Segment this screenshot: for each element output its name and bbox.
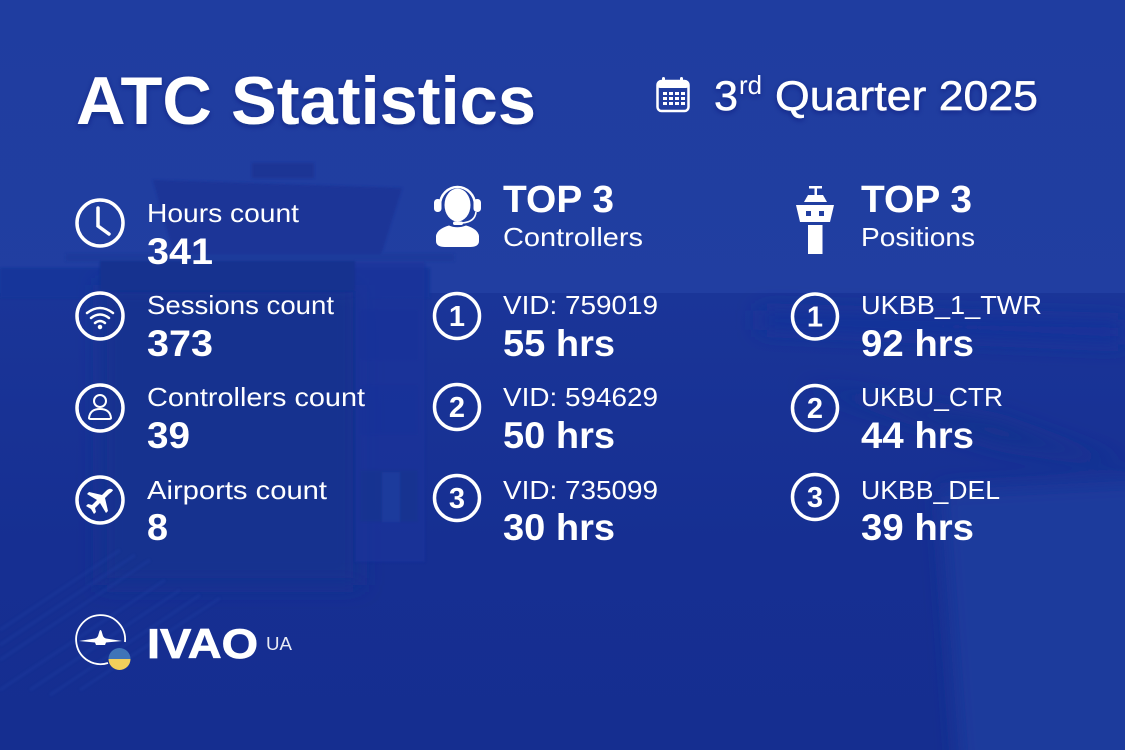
badge: rank 2: 2 bbox=[807, 393, 823, 425]
badge: rank 1: 1 bbox=[807, 302, 823, 334]
quarter label: 3 bbox=[714, 72, 738, 119]
panel: overall counts bbox=[77, 198, 366, 548]
controller 1 bbox=[503, 290, 658, 364]
quarter label: Quarter 2025 bbox=[775, 72, 1038, 119]
wordmark: IVAO bbox=[147, 620, 258, 667]
badge: rank 1 bbox=[434, 294, 480, 338]
controller 2 bbox=[503, 382, 658, 456]
heading: top 3 positions: TOP 3 bbox=[861, 179, 972, 221]
stat: hours count: 341 bbox=[147, 231, 213, 272]
wordmark: UA bbox=[266, 634, 292, 654]
badge: rank 3 bbox=[792, 474, 838, 520]
stat: controllers count: 39 bbox=[147, 415, 190, 456]
logo: IVAO UA bbox=[76, 615, 292, 671]
controller 2: 50 hrs bbox=[503, 415, 615, 456]
stat: airports count bbox=[147, 475, 328, 548]
badge: rank 2 bbox=[792, 386, 838, 430]
position 3: UKBB_DEL bbox=[861, 475, 1000, 505]
controller 1: VID: 759019 bbox=[503, 290, 658, 320]
stat: controllers count bbox=[147, 382, 366, 456]
panel: top 3 controllers bbox=[434, 179, 658, 548]
heading: top 3 controllers: Controllers bbox=[503, 222, 643, 252]
icon: control tower bbox=[796, 186, 834, 254]
quarter label: rd bbox=[739, 70, 762, 100]
badge: rank 2 bbox=[434, 384, 480, 430]
controller 2: VID: 594629 bbox=[503, 382, 658, 412]
badge: rank 3 bbox=[434, 476, 480, 520]
icon: airplane bbox=[77, 477, 123, 523]
title: ATC Statistics bbox=[76, 63, 536, 139]
icon: wifi bbox=[77, 293, 123, 339]
badge: rank 3: 3 bbox=[449, 483, 465, 515]
icon: clock bbox=[77, 200, 123, 246]
position 1: UKBB_1_TWR bbox=[861, 290, 1042, 320]
position 2 bbox=[861, 382, 1003, 456]
controller 3 bbox=[503, 475, 658, 548]
stat: sessions count bbox=[147, 290, 335, 364]
position 1: 92 hrs bbox=[861, 323, 974, 364]
heading: top 3 positions: Positions bbox=[861, 222, 975, 252]
position 3 bbox=[861, 475, 1000, 548]
stat: sessions count: Sessions count bbox=[147, 290, 335, 320]
badge: rank 1 bbox=[792, 294, 838, 339]
controller 3: VID: 735099 bbox=[503, 475, 658, 505]
logo mark: ring, plane and Ukrainian flag bbox=[76, 615, 132, 671]
heading: top 3 positions bbox=[861, 179, 975, 252]
badge: rank 1: 1 bbox=[449, 301, 465, 333]
stat: sessions count: 373 bbox=[147, 323, 213, 364]
heading: top 3 controllers bbox=[503, 179, 643, 252]
controller 1: 55 hrs bbox=[503, 323, 615, 364]
stat: airports count: Airports count bbox=[147, 475, 328, 505]
position 1 bbox=[861, 290, 1042, 364]
stat: hours count bbox=[147, 198, 300, 272]
panel: top 3 positions bbox=[792, 179, 1042, 548]
badge: rank 3: 3 bbox=[807, 482, 823, 514]
icon: headset operator bbox=[434, 187, 481, 247]
wordmark bbox=[147, 620, 292, 667]
controller 3: 30 hrs bbox=[503, 507, 615, 548]
stat: controllers count: Controllers count bbox=[147, 382, 366, 412]
position 2: 44 hrs bbox=[861, 415, 974, 456]
badge: rank 2: 2 bbox=[449, 392, 465, 424]
heading: top 3 controllers: TOP 3 bbox=[503, 179, 614, 221]
stat: airports count: 8 bbox=[147, 507, 168, 548]
icon: calendar bbox=[657, 77, 689, 111]
position 3: 39 hrs bbox=[861, 507, 974, 548]
position 2: UKBU_CTR bbox=[861, 382, 1003, 412]
stat: hours count: Hours count bbox=[147, 198, 300, 228]
icon: person bbox=[77, 385, 123, 431]
